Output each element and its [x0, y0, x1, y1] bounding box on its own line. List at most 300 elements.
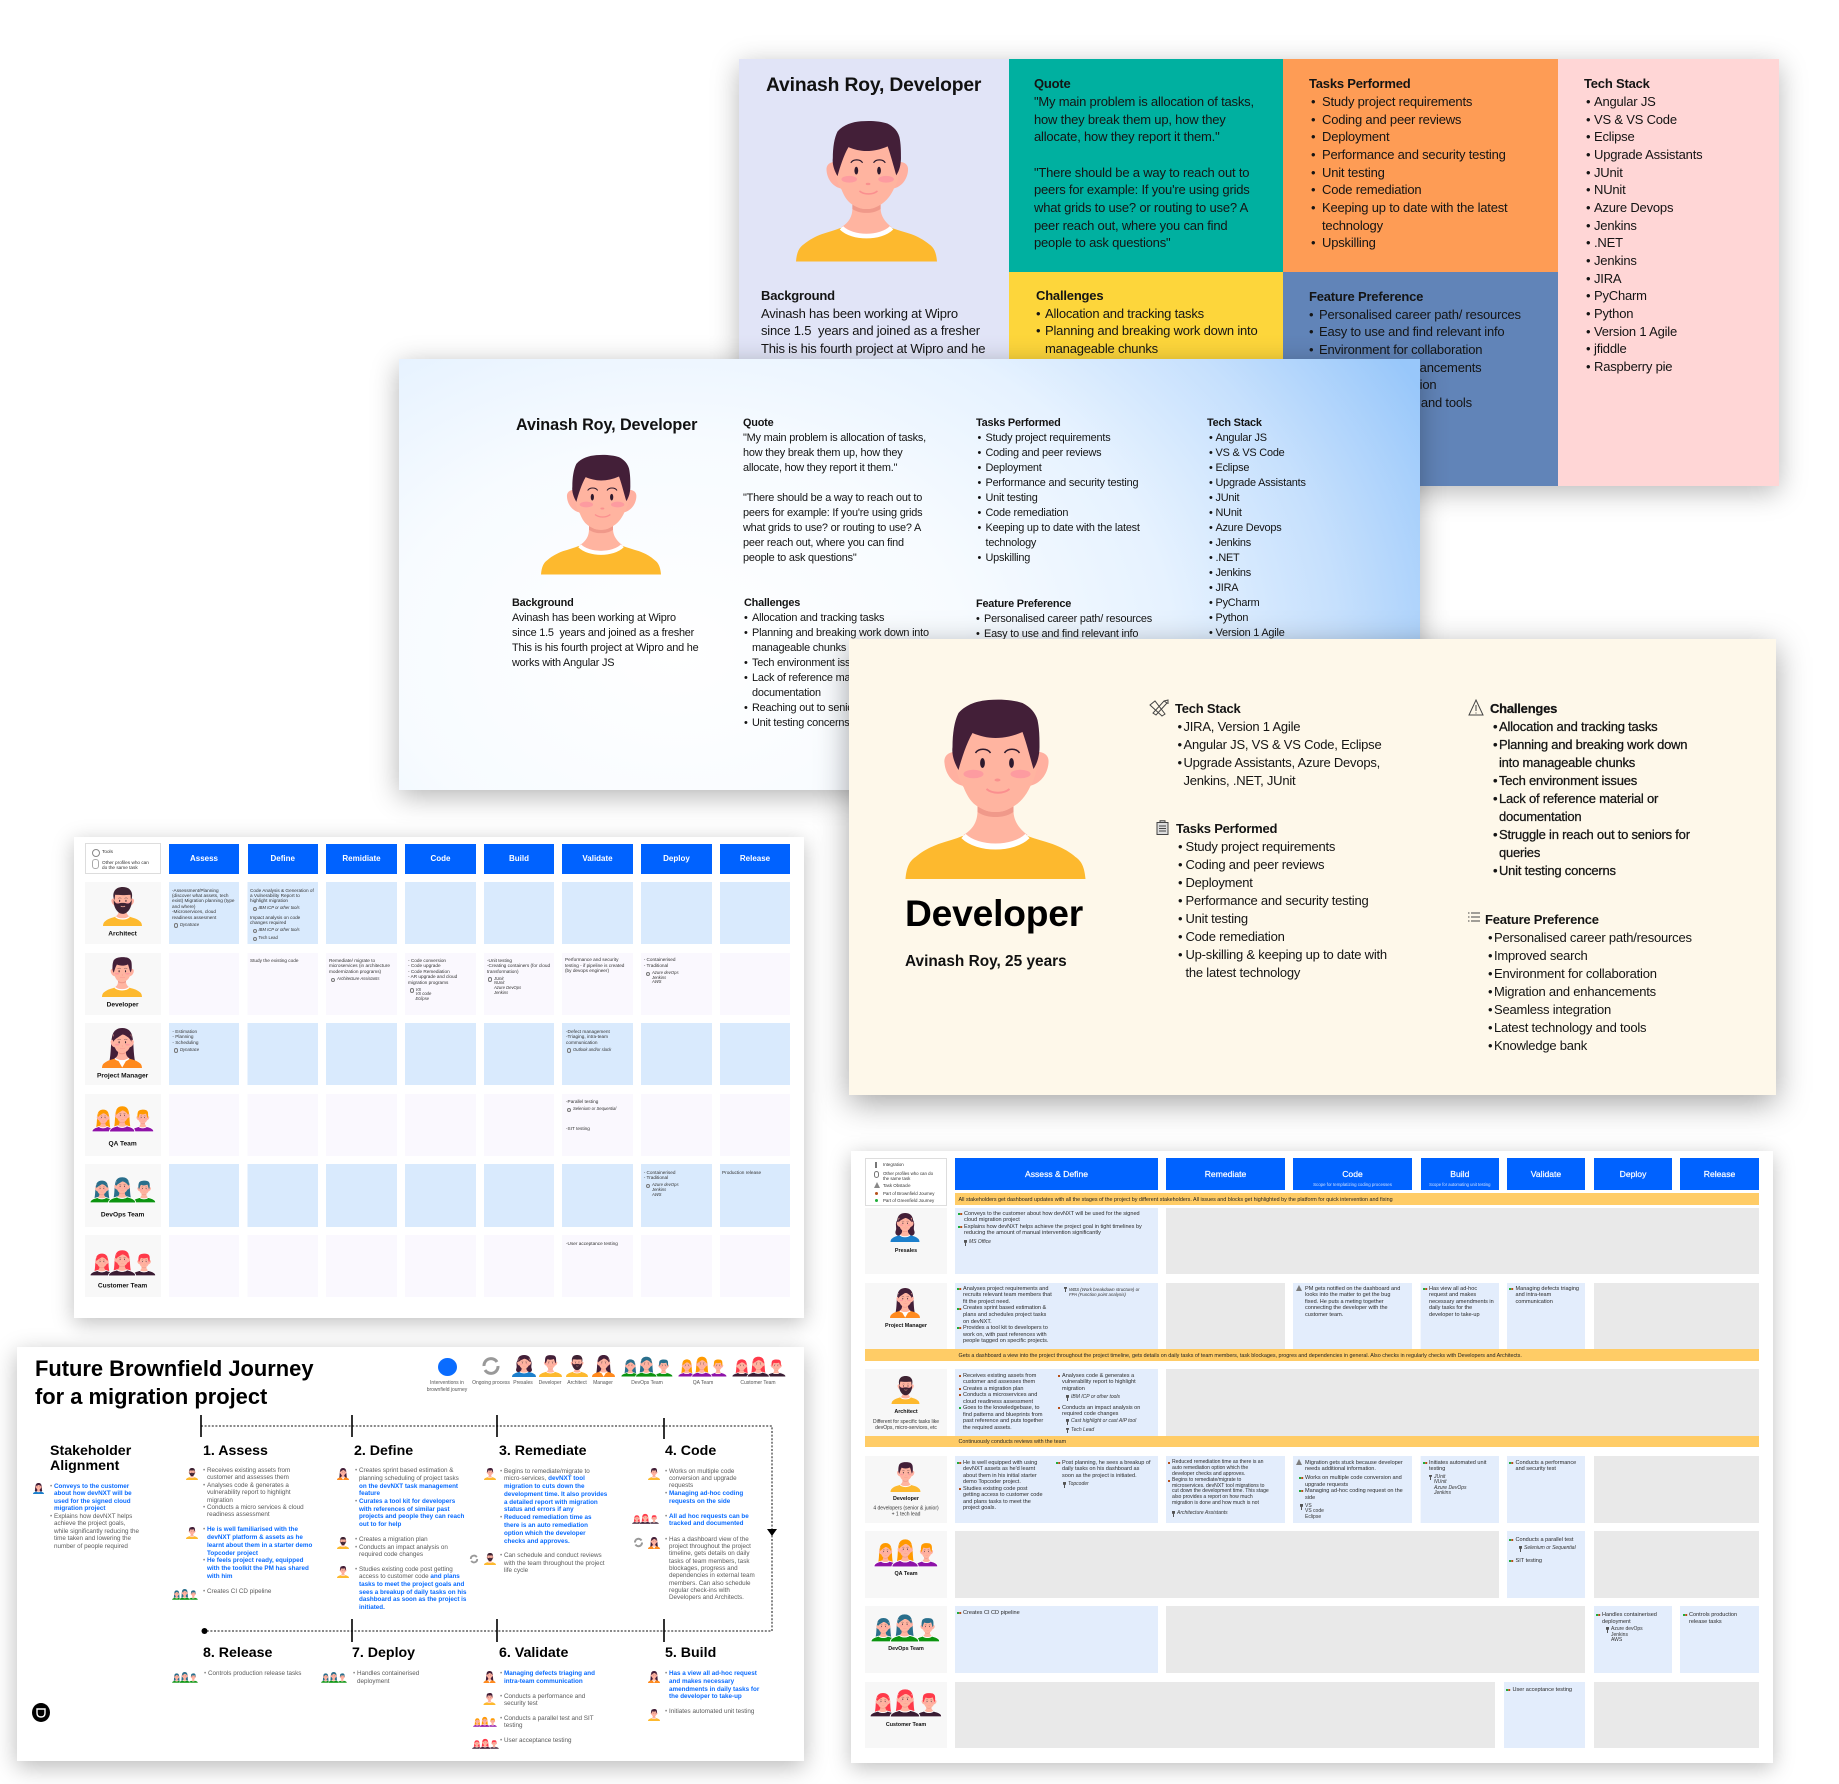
background text: This is his fourth project at Wipro and he [761, 341, 985, 356]
cell: architect assess: -Assessment/Planning [172, 888, 219, 893]
challenges list: • [744, 702, 748, 714]
column header: Assess & Define: Assess & Define [1025, 1169, 1088, 1179]
cell: developer code tasks: upgrade requests [1305, 1482, 1348, 1488]
tasks performed list [976, 416, 1140, 564]
text: build PM: the developer to take-up [669, 1693, 742, 1700]
challenges list: • [1036, 323, 1040, 338]
tool: build tools [1434, 1475, 1467, 1496]
tech stack list: Raspberry pie [1594, 359, 1672, 374]
tech stack list: • [1586, 253, 1590, 268]
text: remediate developer: status and errors if any [504, 1506, 574, 1513]
tech stack list: Angular JS, VS & VS Code, Eclipse [1184, 737, 1381, 752]
yellow note: dashboard updates [955, 1193, 1759, 1205]
cell: PM assess: plans and schedules project tasks [963, 1312, 1046, 1318]
text: assess developer: Topcoder project [207, 1550, 258, 1557]
tech stack list: Jenkins, .NET, JUnit [1184, 773, 1295, 788]
cell: developer code obstacle: needs additional information. [1305, 1466, 1376, 1472]
cell: developer remediate: also provides a report on how much [1172, 1494, 1253, 1500]
tasks performed list: Keeping up to date with the latest [1322, 200, 1507, 215]
text: remediate developer [504, 1468, 607, 1545]
tech stack list: Tech Stack [1584, 76, 1650, 91]
cell: developer left: project goals. [963, 1505, 996, 1511]
persona name: Avinash Roy, 25 years [905, 953, 1067, 970]
cell backgrounds grid [169, 882, 790, 1227]
text: define PM [359, 1467, 464, 1529]
panel: future brownfield journey: • [50, 1513, 52, 1520]
background text: since 1.5 years and joined as a fresher [761, 323, 980, 338]
feature preference list [1485, 912, 1692, 1053]
note: architect [873, 1419, 939, 1431]
text: code developer: Works on multiple code [669, 1468, 734, 1474]
panel: detailed task matrix with journey markers [851, 1151, 1773, 1763]
legend: developer [539, 1355, 562, 1377]
text: stakeholder alignment: number of people required [54, 1543, 128, 1550]
tech stack list: • [1209, 596, 1213, 608]
text: assess developer: devNXT platform & assets as he [207, 1534, 303, 1541]
tool: code editors [416, 988, 431, 1002]
text: code PM dashboard: regular check-ins with [669, 1587, 730, 1594]
tech stack list: Upgrade Assistants [1594, 147, 1702, 162]
background text [512, 596, 699, 668]
note: developer: + 1 tech lead [892, 1512, 920, 1518]
tasks performed list: Coding and peer reviews [986, 446, 1101, 458]
column header: Build: Scope for automating unit testing [1429, 1182, 1490, 1187]
feature preference list: • [1488, 948, 1492, 963]
cell: DevOps deploy [1602, 1612, 1657, 1625]
tasks performed list: • [978, 462, 981, 474]
cell: architect left: Creates a migration plan [963, 1386, 1023, 1392]
cell: PM code [1305, 1286, 1400, 1319]
quote text: "My main problem is allocation of tasks, [1034, 94, 1254, 109]
icon: presales [33, 1483, 44, 1494]
column header: Deploy [1594, 1158, 1672, 1190]
text: stakeholder alignment: while significantly reducing the [54, 1528, 139, 1535]
tool: IBM ICP: IBM ICP or other tools [258, 905, 300, 910]
text: remediate architect: with the team throughout the project [504, 1560, 604, 1567]
tasks performed list: Tasks Performed [1309, 76, 1411, 91]
tasks performed list: • [1311, 129, 1315, 144]
icon: warning triangle [1468, 699, 1484, 716]
heading: 1. Assess: 1. Assess [203, 1442, 268, 1458]
tool: code editors: Eclipse [1305, 1514, 1321, 1520]
tech stack list: • [1586, 271, 1590, 286]
text: assess developer [207, 1526, 312, 1581]
quote tile [1009, 59, 1283, 272]
legend: Task Obstacle [883, 1182, 911, 1188]
feature preference list: Personalised career path/resources [1494, 930, 1692, 945]
label: architect: Architect [894, 1409, 918, 1415]
quote text: peers for example: If you're using grids [743, 506, 922, 518]
cell: developer code tasks: Works on multiple code conversion and [1305, 1475, 1402, 1481]
tasks performed list: • [978, 506, 981, 518]
tech stack list: Eclipse [1594, 129, 1635, 144]
tasks performed list: • [978, 446, 981, 458]
avatar: QA team [874, 1537, 938, 1567]
tech stack list: • [1586, 147, 1590, 162]
cell: architect right: vulnerability report to highlight [1062, 1379, 1136, 1385]
cell: presales assess: Conveys to the customer about how devNXT will be used for the signed [964, 1211, 1140, 1217]
column header: Validate: Validate [1531, 1169, 1561, 1179]
text: code PM dashboard: project throughout the project [669, 1543, 751, 1550]
cell: architect left: find patterns and blueprints from [963, 1412, 1043, 1418]
text: assess developer: He is well familiarised with the [207, 1526, 298, 1533]
text: define architect [359, 1536, 448, 1558]
text: define developer: tasks to meet the project goals and [359, 1581, 464, 1588]
panel: future brownfield journey: • [204, 1670, 206, 1677]
cell: developer remediate [1172, 1460, 1269, 1507]
tech stack list: • [1586, 112, 1590, 127]
panel: future brownfield journey: • [500, 1715, 502, 1722]
tasks performed list: • [1178, 929, 1182, 944]
cell: architect define [250, 888, 314, 903]
text: build PM: Has a view all ad-hoc request [669, 1670, 757, 1677]
panel: future brownfield journey: • [355, 1498, 357, 1505]
cell: PM assess: work on, with past references with [963, 1332, 1047, 1338]
tool: build tools: JUnit [494, 976, 504, 981]
panel: future brownfield journey: • [203, 1526, 205, 1533]
text: define PM: planning scheduling of project tasks [359, 1475, 459, 1482]
feature preference list: • [1488, 966, 1492, 981]
tech stack list: • [1586, 94, 1590, 109]
cell: PM validate: and intra-team [1516, 1292, 1551, 1298]
cell: architect assess [172, 888, 235, 920]
cell: developer validate: (by devops engineer) [565, 968, 609, 973]
cell: architect left: past reference and puts together [963, 1418, 1043, 1424]
tool: code editors: VS code [1305, 1508, 1324, 1514]
text: validate QA [504, 1715, 594, 1730]
cell: PM build: Has view all ad-hoc [1429, 1286, 1477, 1292]
legend: ongoing process [480, 1356, 502, 1376]
tech stack list: • [1209, 612, 1213, 624]
challenges list: • [744, 716, 748, 728]
tasks performed list: Deployment [1186, 875, 1253, 890]
text: code ad-hoc: Managing ad-hoc coding [669, 1490, 743, 1497]
challenges list: Challenges [1490, 701, 1557, 716]
tech stack list: Python [1594, 306, 1633, 321]
quote text: allocate, how they report it them." [1034, 129, 1220, 144]
tech stack list: JUnit [1594, 165, 1623, 180]
cell: DevOps release: Production release [722, 1170, 761, 1175]
tech stack list: Upgrade Assistants, Azure Devops, [1184, 755, 1380, 770]
tasks performed list: Deployment [986, 462, 1042, 474]
cell: QA parallel test: Conducts a parallel test [1516, 1537, 1573, 1543]
text: stakeholder alignment: achieve the project goals, [54, 1520, 125, 1527]
cell: DevOps release [1689, 1612, 1737, 1625]
tool: code editors: Eclipse [416, 996, 429, 1001]
tech stack list: • [1209, 552, 1213, 564]
tech stack list: • [1209, 536, 1213, 548]
tasks performed list: Code remediation [986, 506, 1068, 518]
cell: developer left: demo Topcoder project. [963, 1479, 1021, 1485]
tool: MS Office: MS Office [969, 1239, 991, 1245]
tasks performed list: • [978, 476, 981, 488]
label: presales: Presales [895, 1248, 917, 1254]
text: stakeholder alignment: about how devNXT will be [54, 1490, 132, 1497]
feature preference list: Feature Preference [1485, 912, 1599, 927]
tech stack list: • [1209, 522, 1213, 534]
label: QA team: QA Team [894, 1571, 918, 1577]
challenges list: Tech environment issues [752, 656, 867, 668]
challenges list: Planning and breaking work down into [752, 626, 929, 638]
tasks performed list: Study project requirements [1186, 839, 1335, 854]
panel: future brownfield journey: • [353, 1670, 355, 1677]
text: remediate developer: micro-services, devNXT tool [504, 1475, 585, 1482]
cell: PM validate: -Defect management [566, 1029, 610, 1034]
avatar: developer [796, 121, 937, 262]
quote text: Quote [1034, 76, 1071, 91]
panel: future brownfield journey: • [665, 1512, 667, 1520]
text: code customer: tracked and documented [669, 1520, 744, 1527]
tasks performed list [1176, 821, 1387, 980]
feature preference list: • [1488, 1038, 1492, 1053]
tasks performed list: • [1311, 112, 1315, 127]
panel: future brownfield journey: • [355, 1536, 357, 1543]
tool: deploy tools: Jenkins [652, 1187, 666, 1192]
text: code ad-hoc [669, 1490, 743, 1505]
panel: future brownfield journey: • [355, 1544, 357, 1550]
feature preference list: Migration and enhancements [1494, 984, 1656, 999]
cell: DevOps deploy: Handles containerised [1602, 1612, 1657, 1618]
tech stack list: • [1586, 288, 1590, 303]
tool: WBS [1069, 1287, 1140, 1297]
legend: interventions [438, 1358, 456, 1376]
text: define PM: Creates sprint based estimation & [359, 1467, 454, 1474]
icon: developer [648, 1709, 660, 1721]
tech stack list: .NET [1216, 552, 1240, 564]
legend label: QA team: QA Team [693, 1380, 713, 1386]
text: assess developer: with him [207, 1573, 233, 1580]
challenges list: Reaching out to seniors [752, 702, 862, 714]
tool: deploy tools: AWS [1611, 1637, 1622, 1643]
cell: developer deploy: - Containerised [644, 957, 675, 962]
challenges list: • [1493, 773, 1497, 788]
label: DevOps team: DevOps Team [888, 1646, 924, 1652]
background text: since 1.5 years and joined as a fresher [512, 626, 694, 638]
tech stack list: VS & VS Code [1216, 446, 1285, 458]
feature preference list: • [1309, 395, 1313, 410]
tech stack list [1584, 76, 1702, 374]
cell: PM assess: on devNXT. [963, 1319, 992, 1325]
cell: DevOps deploy: - Traditional [644, 1175, 668, 1180]
quote text [1034, 76, 1254, 250]
feature preference list: Latest technology and tools [1494, 1020, 1646, 1035]
tech stack list: Tech Stack [1207, 416, 1262, 428]
avatar: developer [102, 957, 142, 997]
tech stack list: Jenkins [1594, 218, 1637, 233]
panel: future brownfield journey: • [203, 1557, 205, 1564]
feature preference list: Latest technology and tools [1319, 395, 1472, 410]
text: code PM dashboard: tasks of team members, task [669, 1558, 750, 1565]
tech stack list: NUnit [1216, 506, 1242, 518]
text: assess architect: migration [207, 1497, 233, 1504]
quote text: allocate, how they report it them." [743, 462, 897, 474]
tool: build tools: Jenkins [1434, 1490, 1451, 1496]
title: for a migration project [35, 1384, 267, 1409]
text: code PM dashboard: blockages, progress and [669, 1565, 738, 1572]
icon: list [1468, 912, 1480, 922]
cell: presales assess: cloud migration project [964, 1217, 1020, 1223]
cell: PM build: request and makes [1429, 1292, 1476, 1298]
cell: customer validate: -User acceptance testing [566, 1241, 618, 1246]
text: remediate developer: migration to cuts down the [504, 1483, 584, 1490]
tech stack list: JIRA [1594, 271, 1621, 286]
tech stack list: VS & VS Code [1594, 112, 1677, 127]
panel: future brownfield journey: • [355, 1467, 357, 1474]
tech stack list: • [1586, 129, 1590, 144]
panel: task matrix by role [74, 837, 804, 1318]
cell: PM validate: Managing defects triaging [1516, 1286, 1579, 1292]
icon: ongoing process [633, 1537, 644, 1548]
cell: PM code: connecting the developer with the [1305, 1305, 1388, 1311]
label: Project Manager: Project Manager [97, 1072, 148, 1080]
icon: architect [337, 1537, 349, 1549]
text: assess architect: Receives existing assets from [207, 1467, 290, 1474]
cell: developer left: getting access to customer code [963, 1492, 1043, 1498]
quote text [743, 416, 926, 564]
cell: developer code: - Code conversion [408, 958, 446, 963]
text: release: Controls production release tasks [208, 1670, 301, 1677]
cell: architect impact: required code changes [1062, 1411, 1118, 1417]
logo [32, 1703, 50, 1722]
tech stack tile [1558, 59, 1779, 486]
challenges list [744, 596, 929, 728]
icon: devops team [321, 1671, 347, 1683]
tasks performed list: Unit testing [1186, 911, 1248, 926]
tech stack list: • [1209, 476, 1213, 488]
tech stack list: • [1586, 182, 1590, 197]
icon: clipboard [1156, 820, 1168, 835]
feature preference list: • [1488, 1020, 1492, 1035]
text: remediate architect [504, 1552, 604, 1575]
tasks performed list: technology [986, 536, 1036, 548]
cell: developer code tasks: side [1305, 1494, 1315, 1500]
tasks performed list: technology [1322, 218, 1383, 233]
text: deploy [357, 1670, 419, 1685]
tech stack list [1207, 416, 1306, 638]
text: define architect: required code changes [359, 1551, 423, 1558]
tool: Architecture Assistants: Architecture Assistants [337, 976, 379, 981]
cell: developer deploy: - Traditional [644, 963, 668, 968]
tasks performed list: Study project requirements [986, 432, 1110, 444]
yellow note: PM dashboard: Gets a dashboard a view into the project throughout the project timeline, gets details on daily tasks of team members, task blockages, progres and dependencies in general. Also checks in regularly checks with Developers and Architects. [958, 1353, 1522, 1359]
cell: architect left: Goes to the knowledgebase, to [963, 1405, 1039, 1411]
column header: Assess: Assess [190, 854, 218, 863]
feature preference list: Migration and enhancements [1319, 360, 1481, 375]
legend: manager [592, 1355, 615, 1377]
icon: customer team [632, 1513, 659, 1524]
tech stack list: • [1586, 200, 1590, 215]
cell: developer remediate [329, 958, 390, 974]
quote text: "There should be a way to reach out to [743, 492, 922, 504]
icon: developer [337, 1566, 349, 1578]
tasks performed list: Upskilling [1322, 235, 1376, 250]
feature preference tile [1283, 272, 1558, 486]
challenges list: Challenges [744, 596, 800, 608]
tech stack list [1175, 701, 1382, 788]
tasks performed list: Unit testing [986, 492, 1038, 504]
icon: developer [186, 1527, 198, 1539]
panel: future brownfield journey: • [355, 1566, 357, 1572]
tool: WBS: WBS (Work breakdown structure) or [1069, 1287, 1140, 1292]
cell: developer validate [1516, 1460, 1576, 1472]
tasks performed list: Code remediation [1322, 182, 1421, 197]
legend: do the same task [102, 865, 138, 870]
challenges list: Planning and breaking work down into [1045, 323, 1258, 338]
tasks performed list: • [1178, 893, 1182, 908]
tasks performed list: Upskilling [986, 552, 1030, 564]
heading: stakeholder alignment: Alignment [50, 1458, 119, 1474]
tech stack list: Jenkins [1216, 566, 1251, 578]
icon: project manager [483, 1671, 496, 1683]
background text: Avinash has been working at Wipro [512, 612, 676, 624]
text: code PM dashboard: Developers and Architects. [669, 1594, 744, 1601]
tool: build tools: Azure DevOps [1434, 1484, 1467, 1490]
cell: developer build [487, 958, 550, 974]
cell: developer right [1062, 1460, 1151, 1479]
tasks performed list: • [1311, 165, 1315, 180]
title [35, 1355, 314, 1411]
tool: Selenium: Selenium or Sequential [573, 1106, 616, 1111]
cell: PM assess [963, 1286, 1052, 1345]
text: code ad-hoc: requests on the side [669, 1498, 730, 1505]
icon: architect [484, 1553, 496, 1565]
tasks performed list: • [1311, 235, 1315, 250]
tech stack list: • [1586, 306, 1590, 321]
cell: PM code: PM gets notified on the dashboard and [1305, 1286, 1400, 1292]
cell: PM validate [566, 1029, 610, 1045]
text: code customer [669, 1512, 749, 1528]
label: DevOps Team: DevOps Team [101, 1212, 144, 1218]
cell: developer left: Studies existing code post [963, 1486, 1027, 1492]
icon: architect [186, 1468, 198, 1480]
icon: QA team [473, 1716, 497, 1727]
challenges list: • [1493, 737, 1497, 752]
avatar: developer [906, 700, 1086, 879]
feature preference list: • [1309, 307, 1313, 322]
column header: Release [720, 844, 790, 874]
heading: 6. Validate: 6. Validate [499, 1644, 568, 1660]
column header: Code [405, 844, 476, 874]
heading: stakeholder alignment: Stakeholder [50, 1442, 131, 1458]
label: developer: Developer [893, 1496, 919, 1502]
feature preference list: • [1488, 984, 1492, 999]
tech stack list: Angular JS [1594, 94, 1656, 109]
text: validate PM: intra-team communication [504, 1678, 583, 1685]
avatar: QA team [92, 1106, 154, 1132]
cell: developer remediate: microservices. devNXT tool migrations to [1172, 1482, 1264, 1488]
avatar: customer team [90, 1250, 156, 1276]
tasks performed list: • [978, 552, 981, 564]
column header: Validate [562, 844, 633, 874]
challenges list: Unit testing concerns [752, 716, 850, 728]
tasks performed list: • [1178, 857, 1182, 872]
cell: architect right: Analyses code & generates a [1062, 1372, 1134, 1378]
tasks performed list: • [1311, 147, 1315, 162]
text: code customer: All ad hoc requests can be [669, 1512, 749, 1520]
tech stack list: Version 1 Agile [1216, 626, 1285, 638]
label: QA Team: QA Team [108, 1140, 137, 1148]
challenges list: Allocation and tracking tasks [752, 612, 884, 624]
legend: architect [566, 1355, 588, 1377]
avatar: project manager [102, 1028, 142, 1068]
tasks performed list: Performance and security testing [986, 476, 1138, 488]
column header: Code: Code [430, 854, 450, 863]
feature preference list: Improved search [1494, 948, 1588, 963]
timeline path [0, 0, 810, 1760]
tech stack list: • [1586, 341, 1590, 356]
legend label: interventions: Interventions in [430, 1380, 464, 1386]
tasks performed list: Deployment [1322, 129, 1389, 144]
